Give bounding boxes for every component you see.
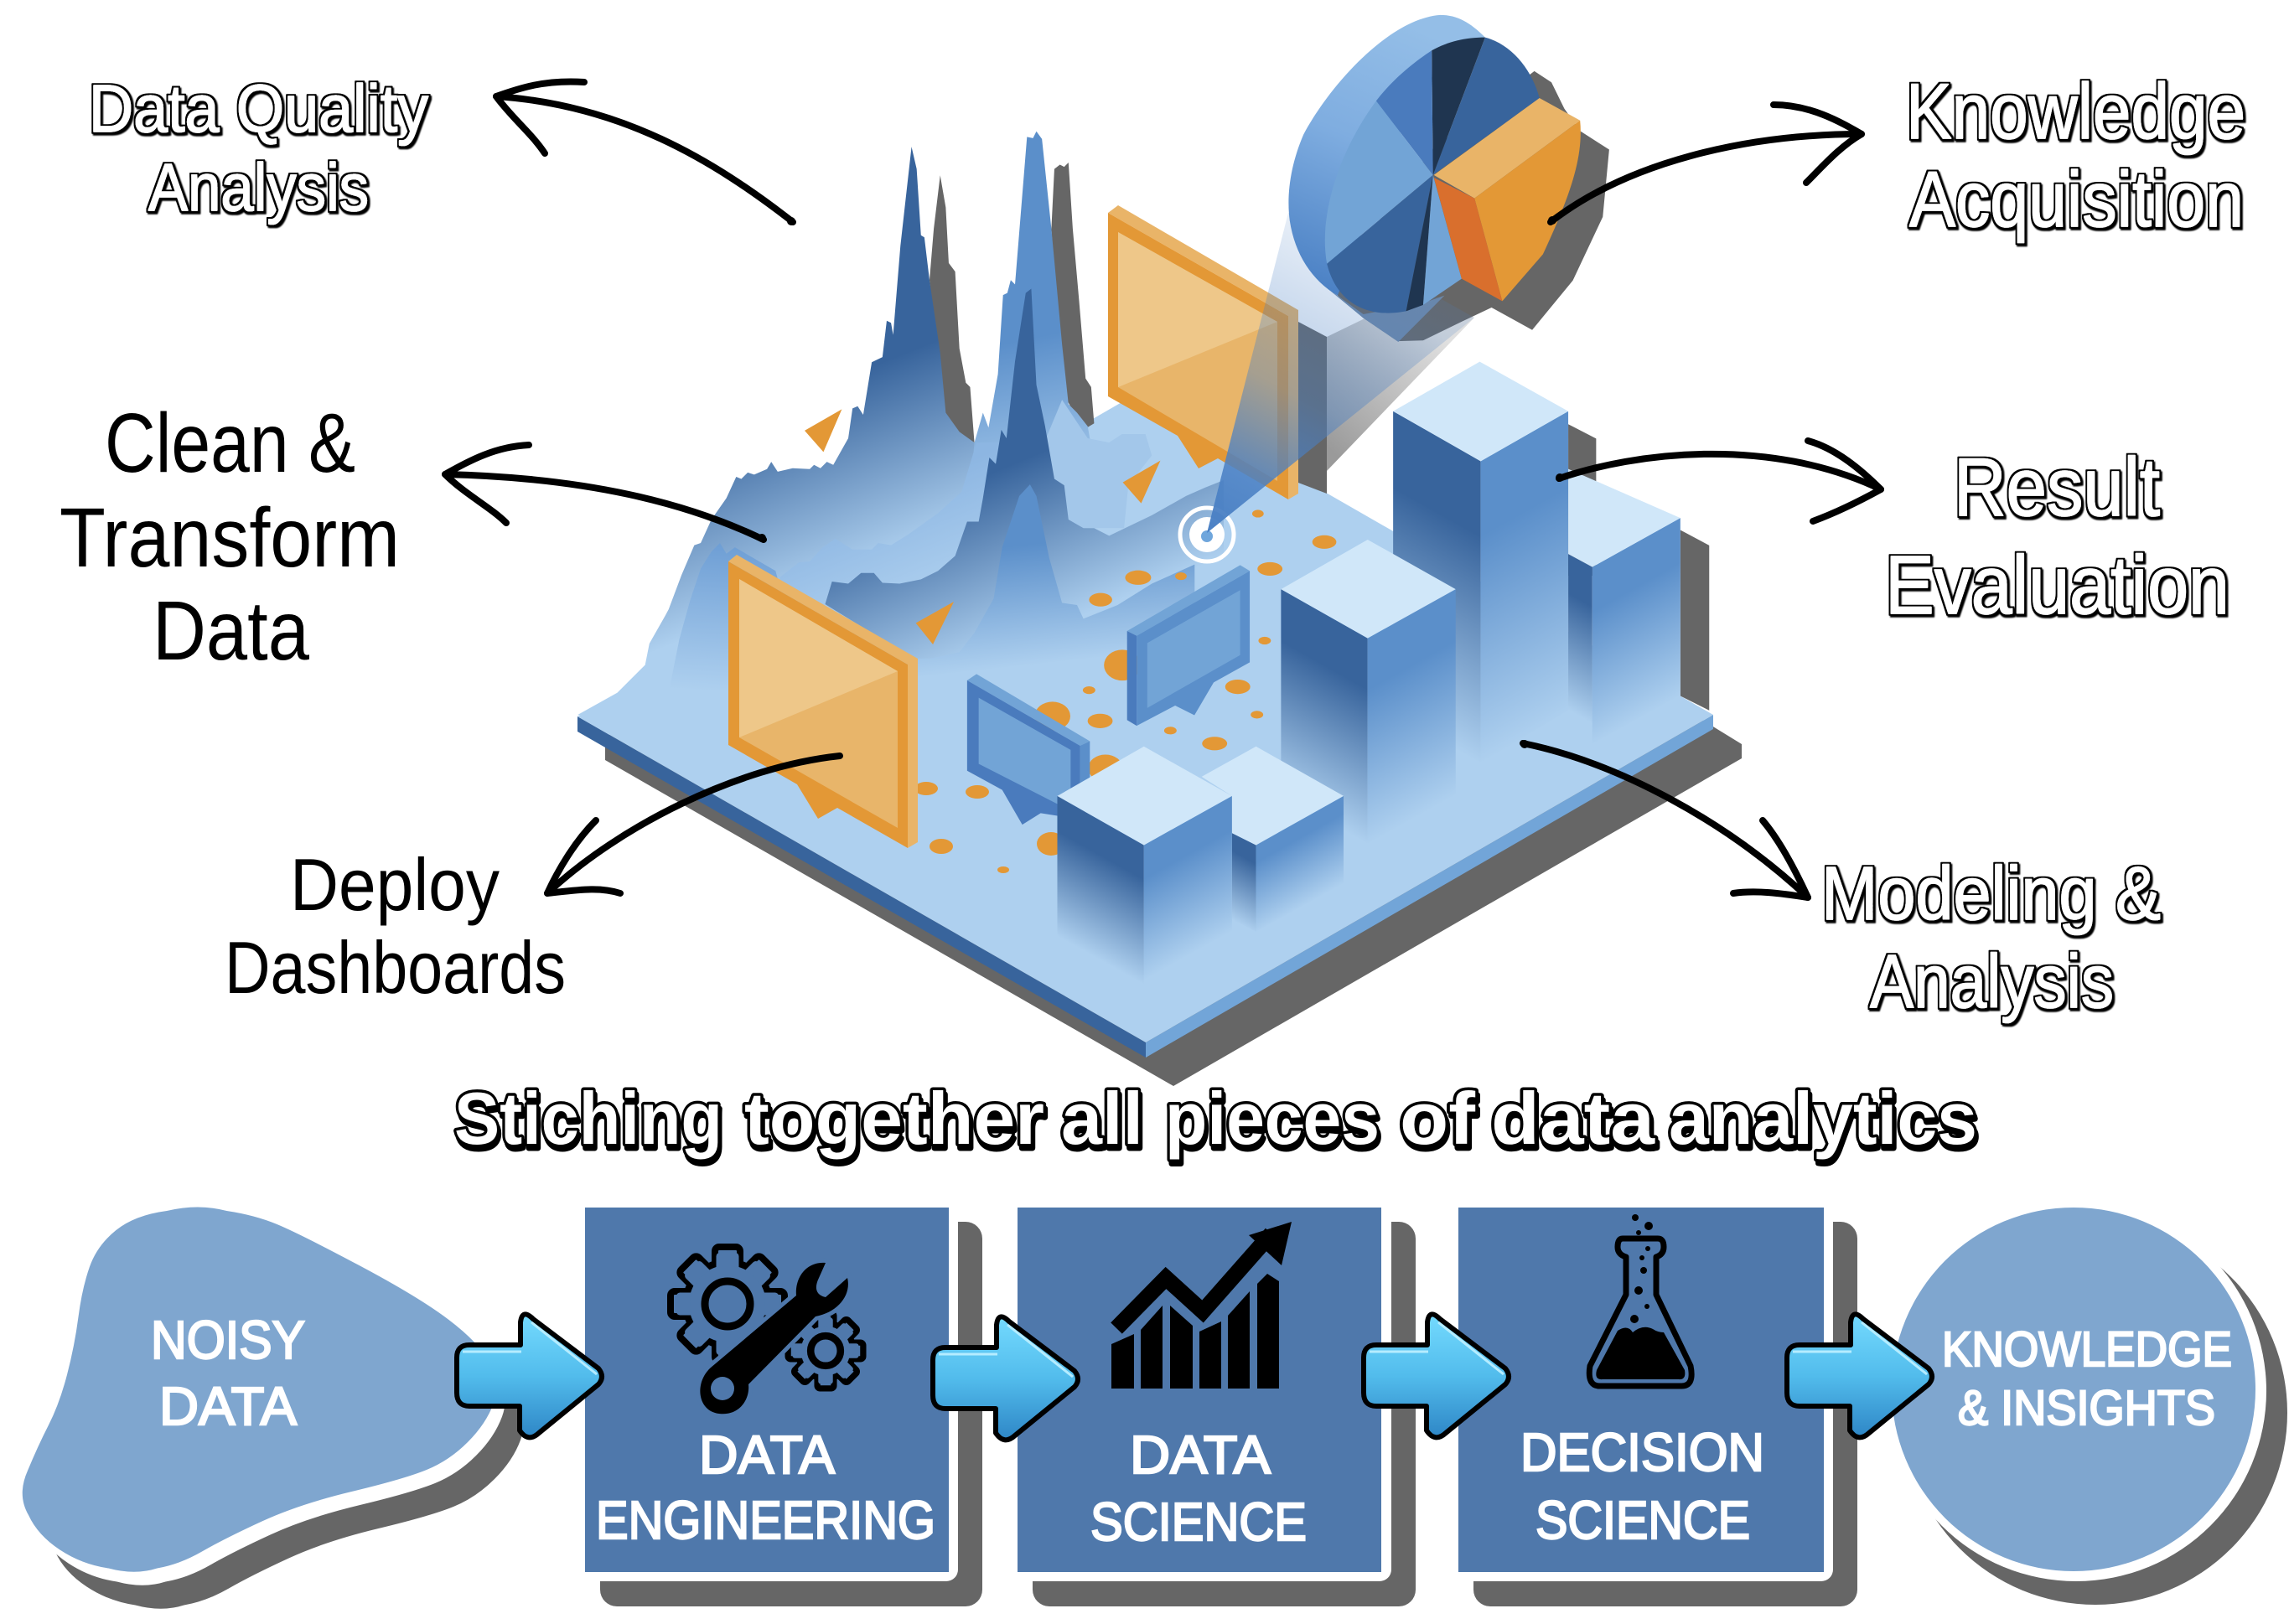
blue panel: back xyxy=(1127,565,1250,726)
icon: gears and wrench xyxy=(671,1247,863,1414)
small orange triangles xyxy=(805,409,1160,644)
title xyxy=(454,1077,1977,1160)
label: Knowledge Acquisition: Knowledge xyxy=(1906,67,2245,155)
mountain peak shadows xyxy=(930,163,1094,442)
tower: middle xyxy=(1281,540,1456,845)
blue panel: front xyxy=(967,674,1090,825)
panel: data engineering xyxy=(570,1194,982,1606)
panel: decision science: SCIENCE xyxy=(1535,1490,1750,1550)
title: analytics xyxy=(1669,1077,1977,1160)
label: Data Quality Analysis: Data Quality xyxy=(89,71,428,146)
label: Deploy Dashboards: Dashboards xyxy=(225,926,566,1009)
label: Clean and Transform Data: Clean & xyxy=(105,396,355,490)
label: Data Quality Analysis: Analysis xyxy=(148,150,369,225)
title: all xyxy=(1061,1077,1143,1160)
label: Clean and Transform Data: Transform xyxy=(60,491,400,585)
arrow: to result evaluation xyxy=(1556,441,1881,521)
label: Result Evaluation: Evaluation xyxy=(1885,539,2229,631)
panel: data science xyxy=(1002,1194,1416,1606)
tower: small rear xyxy=(1202,747,1344,932)
title: pieces xyxy=(1165,1077,1380,1160)
pale area right of the peak xyxy=(1041,400,1152,528)
label: Deploy Dashboards: Deploy xyxy=(290,843,500,926)
label: Clean and Transform Data: Data xyxy=(153,584,309,678)
title: data xyxy=(1491,1077,1655,1160)
arrow: data engineering to data science xyxy=(933,1316,1078,1440)
peak layer two xyxy=(960,132,1096,613)
label: Result Evaluation xyxy=(1885,441,2229,631)
pie chart rim xyxy=(1288,15,1485,296)
bar towers xyxy=(1057,362,1709,985)
label: Result Evaluation: Result xyxy=(1954,441,2160,533)
label: Knowledge Acquisition xyxy=(1906,67,2245,243)
arrow: decision science to knowledge xyxy=(1787,1314,1932,1437)
light beam xyxy=(1207,213,1474,533)
label: Modeling and Analysis xyxy=(1821,852,2161,1024)
label: Deploy Dashboards xyxy=(225,843,566,1009)
peak layer one xyxy=(577,147,981,742)
orange panel: front left xyxy=(728,555,918,848)
label: Data Quality Analysis xyxy=(89,71,428,225)
panel: decision science: DECISION xyxy=(1520,1422,1764,1482)
panel: data science: SCIENCE xyxy=(1090,1492,1307,1552)
label: Knowledge Acquisition: Acquisition xyxy=(1909,155,2244,243)
label: Clean and Transform Data xyxy=(60,396,400,678)
tower: tall xyxy=(1393,362,1596,763)
label: Modeling and Analysis: Modeling & xyxy=(1821,852,2161,936)
panel: decision science xyxy=(1443,1194,1857,1606)
panel: data science: DATA xyxy=(1130,1425,1271,1485)
arrow: data science to decision science xyxy=(1364,1314,1509,1437)
arrow: to clean and transform xyxy=(445,445,766,542)
platform slab xyxy=(577,389,1713,1058)
circle: knowledge and insights: & INSIGHTS xyxy=(1958,1381,2215,1435)
blob: noisy data: NOISY xyxy=(151,1310,305,1370)
mountain peaks xyxy=(577,132,1224,742)
orange data dots xyxy=(914,509,1336,873)
front medium peak xyxy=(917,484,1194,742)
pie chart shadow xyxy=(1327,71,1609,342)
title: Stiching xyxy=(454,1077,722,1160)
target marker xyxy=(1180,508,1234,561)
isometric data platform illustration xyxy=(577,15,1742,1086)
title: together xyxy=(744,1077,1044,1160)
dark middle ridge xyxy=(825,288,1224,660)
circle: knowledge and insights xyxy=(1886,1201,2287,1605)
tower: right xyxy=(1568,469,1709,744)
circle: knowledge and insights: KNOWLEDGE xyxy=(1942,1322,2232,1377)
arrow: to deploy dashboards xyxy=(547,756,840,893)
gray cone shadow xyxy=(1327,293,1474,471)
icon: growth chart xyxy=(1111,1222,1292,1389)
pie chart orange wedge xyxy=(1434,98,1581,301)
arrow: to modeling and analysis xyxy=(1520,740,1808,897)
arrow: noisy data to data engineering xyxy=(457,1314,602,1437)
tower: front xyxy=(1057,747,1232,985)
label: Modeling and Analysis: Analysis xyxy=(1870,940,2114,1024)
arrow: to data quality xyxy=(496,81,795,225)
blob: noisy data xyxy=(23,1207,524,1609)
title: of xyxy=(1400,1077,1476,1160)
panel: data engineering: ENGINEERING xyxy=(596,1490,935,1550)
pale wavy layer xyxy=(779,442,1023,699)
arrow: to knowledge acquisition xyxy=(1548,105,1862,225)
pie chart xyxy=(1288,15,1581,313)
blob: noisy data: DATA xyxy=(159,1376,297,1436)
curved arrows xyxy=(445,81,1881,897)
left front peak xyxy=(669,543,810,699)
icon: flask xyxy=(1589,1214,1691,1386)
pie chart face slices xyxy=(1325,38,1540,313)
panel: data engineering: DATA xyxy=(699,1425,835,1485)
platform shadow xyxy=(605,419,1742,1086)
orange panel: rear xyxy=(1108,205,1327,499)
